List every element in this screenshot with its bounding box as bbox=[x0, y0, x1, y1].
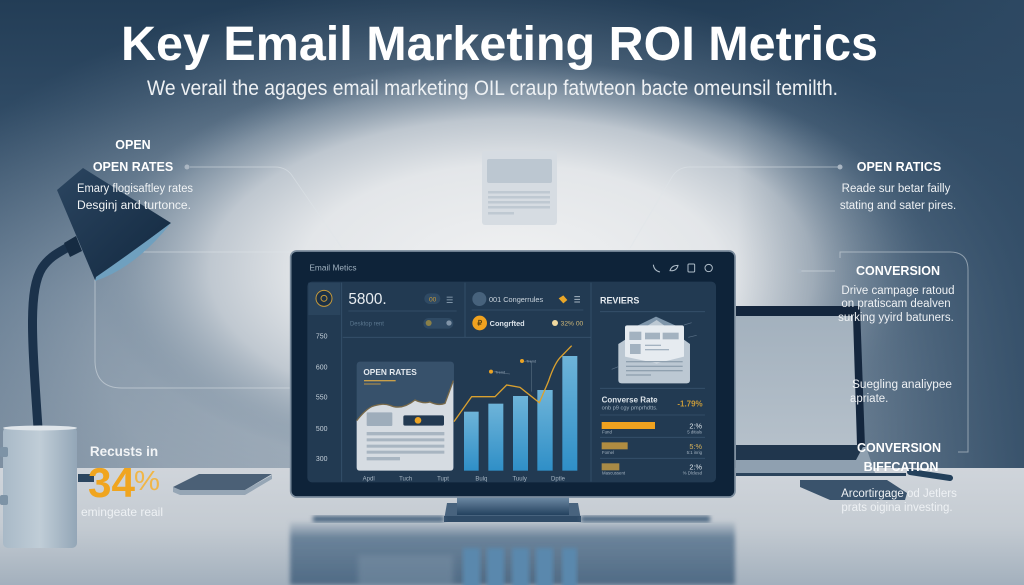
stat: 5800: Desktop rent bbox=[350, 321, 384, 327]
right callout: conversion bifecation: CONVERSION bbox=[857, 441, 941, 455]
left callout: open rates: OPEN bbox=[115, 138, 151, 152]
right callout: open ratics: Reade sur betar failly bbox=[842, 183, 951, 195]
chart x labels: Tupt bbox=[437, 477, 449, 483]
progress row 3: Mascussent bbox=[602, 471, 626, 476]
laptop bbox=[736, 306, 906, 476]
y axis labels: 500 bbox=[316, 426, 328, 433]
right callout: open ratics bbox=[840, 160, 956, 212]
chart x labels: Tuch bbox=[399, 477, 412, 483]
left callout: 34% result: 34 bbox=[88, 459, 136, 506]
right callout: suegling note bbox=[850, 379, 952, 405]
chart: gold trend line: Trend bbox=[495, 369, 505, 374]
dashboard panel bbox=[307, 282, 716, 482]
right callout: conversion: on pratiscam dealven bbox=[841, 298, 951, 310]
monitor reflection on desk bbox=[290, 522, 735, 585]
right callout: open ratics: OPEN RATICS bbox=[857, 160, 941, 174]
chart x labels: Bulq bbox=[475, 477, 487, 483]
panel dividers bbox=[342, 283, 705, 482]
chart: blue bars bbox=[464, 356, 577, 471]
chart: gold trend line bbox=[454, 346, 572, 422]
chart x labels: Dptle bbox=[551, 477, 566, 483]
y axis labels bbox=[316, 334, 328, 463]
chart: open rates card: OPEN RATES bbox=[363, 367, 417, 377]
stat: congrfied: Congrfted bbox=[490, 319, 525, 328]
progress row 3 bbox=[602, 463, 703, 476]
progress row 3: 2:% bbox=[689, 463, 702, 472]
y axis labels: 750 bbox=[316, 334, 328, 341]
header icons bbox=[653, 264, 712, 272]
y axis labels: 600 bbox=[316, 364, 328, 371]
stat: congrfied bbox=[472, 316, 584, 330]
y axis labels: 300 bbox=[316, 456, 328, 463]
title: Key Email Marketing ROI Metrics bbox=[121, 18, 878, 71]
desk surface bbox=[0, 468, 1024, 585]
stat: 5800: 5800. bbox=[348, 291, 387, 308]
conversion rate row: onb p9 cgy pmprhdtts. bbox=[602, 405, 658, 411]
right callout: open ratics: stating and sater pires. bbox=[840, 200, 956, 212]
chart x labels: Tuuly bbox=[512, 477, 527, 483]
right callout: conversion: CONVERSION bbox=[856, 264, 940, 278]
header title: Email Metics bbox=[309, 263, 357, 273]
stat: congratules: 001 Congerrules bbox=[489, 295, 544, 304]
connector dots bbox=[184, 164, 842, 274]
right callout: conversion bifecation: prats oigina investing. bbox=[841, 502, 953, 514]
right callout: conversion bifecation: BIFFCATION bbox=[864, 460, 938, 474]
monitor dashboard bbox=[291, 251, 735, 497]
right callout: suegling note: apriate. bbox=[850, 393, 888, 405]
y axis labels: 550 bbox=[316, 395, 328, 402]
desk lamp bbox=[32, 168, 171, 428]
monitor stand bbox=[313, 497, 710, 522]
progress row 2: 5:% bbox=[689, 442, 702, 451]
notebook and pen bbox=[800, 472, 950, 500]
progress row 1: Fund bbox=[602, 430, 612, 435]
right callout: conversion bifecation: Arcortirgage od Jetlers bbox=[841, 488, 957, 500]
chart x labels bbox=[363, 477, 566, 483]
logo cell bbox=[308, 283, 340, 315]
left callout: open rates bbox=[77, 138, 193, 212]
subtitle: We verail the agages email marketing OIL craup fatwteon bacte omeunsil temilth. bbox=[147, 77, 838, 100]
progress row 3: % Dlclesd bbox=[683, 471, 703, 476]
pen cup bbox=[0, 426, 94, 548]
connector lines bbox=[95, 167, 968, 452]
left callout: 34% result: Recusts in bbox=[90, 444, 158, 459]
left callout: open rates: Emary flogisaftley rates bbox=[77, 183, 193, 195]
icon: envelope bbox=[612, 317, 697, 383]
conversion rate row: -1.79% bbox=[677, 399, 703, 408]
progress row 1 bbox=[602, 421, 702, 435]
icon: faded document bbox=[482, 151, 557, 225]
right callout: suegling note: Suegling analiypee bbox=[852, 379, 952, 391]
chart: open rates card bbox=[357, 362, 454, 471]
progress row 2: 5:1 inrig bbox=[687, 450, 703, 455]
chart: gold trend line: Trend bbox=[526, 359, 536, 364]
left callout: 34% result bbox=[81, 444, 163, 519]
stat: 5800: 00 bbox=[429, 296, 437, 303]
left callout: 34% result: emingeate reail bbox=[81, 505, 163, 519]
chart x labels: Apdl bbox=[363, 477, 375, 483]
left callout: open rates: OPEN RATES bbox=[93, 160, 173, 174]
left callout: open rates: Desginj and turtonce. bbox=[77, 200, 191, 212]
progress row 2 bbox=[602, 442, 703, 455]
stat: 5800 bbox=[348, 291, 453, 329]
left callout: 34% result: % bbox=[134, 465, 160, 496]
phone bbox=[173, 474, 272, 495]
right callout: conversion: Drive campage ratoud bbox=[841, 285, 955, 297]
right callout: conversion: surking yyird batuners. bbox=[838, 312, 954, 324]
bezel bbox=[291, 251, 735, 497]
reviews heading: REVIERS bbox=[600, 295, 639, 305]
right callout: conversion bifecation bbox=[841, 441, 957, 514]
stat: congratules bbox=[472, 292, 580, 306]
stat: congrfied: 32% 00 bbox=[561, 321, 584, 328]
stat: congrfied: ₽ bbox=[477, 319, 482, 328]
progress row 2: Fomel bbox=[602, 450, 614, 455]
conversion rate row bbox=[602, 395, 703, 411]
right callout: conversion bbox=[838, 264, 955, 324]
progress row 1: 5 ditials bbox=[687, 429, 702, 434]
conversion rate row: Converse Rate bbox=[602, 395, 658, 404]
progress row 1: 2:% bbox=[689, 421, 702, 430]
